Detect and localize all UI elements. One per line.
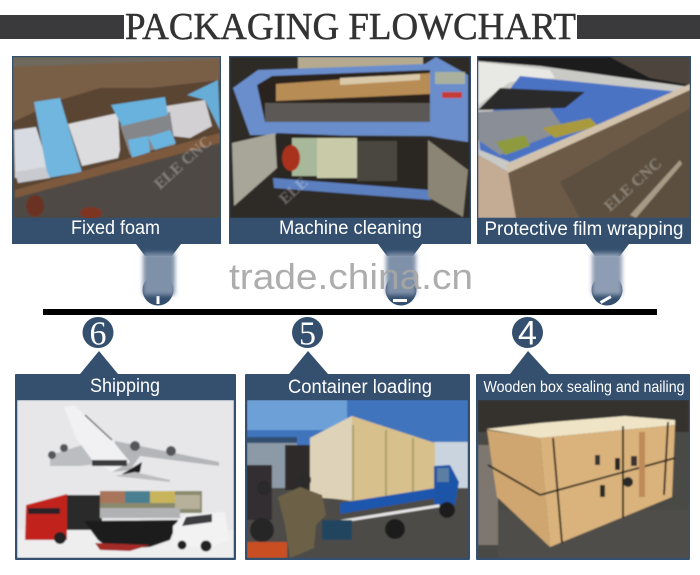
label: Shipping: Shipping	[90, 376, 160, 397]
badge: step 5: 5	[299, 316, 316, 352]
badge: step 6: 6	[90, 316, 106, 352]
photo: plane, truck, ship and van	[17, 400, 234, 558]
connector: step 1 badge	[136, 244, 181, 306]
badge: step 4: 4	[518, 314, 537, 352]
timeline bar	[43, 309, 657, 315]
badge: step 4	[510, 314, 549, 374]
badge: step 5	[289, 316, 328, 374]
photo: laser machine: ELE	[276, 174, 311, 208]
connector: step 3 badge	[586, 244, 629, 306]
photo: film wrapped machine in crate: ELE CNC	[601, 155, 665, 215]
photo: laser machine	[230, 57, 470, 218]
panel: step 1 fixed foam	[12, 56, 221, 244]
label: Machine cleaning: Machine cleaning	[279, 218, 422, 239]
label: Protective film wrapping: Protective film wrapping	[484, 219, 684, 240]
connector: step 2 badge	[378, 244, 422, 306]
panel: step 6 shipping	[15, 374, 236, 560]
label: Fixed foam: Fixed foam	[71, 218, 160, 239]
photo: foam in cardboard box: ELE CNC	[151, 133, 215, 193]
watermark: trade.china.cn: trade.china.cn	[229, 256, 473, 297]
panel: step 4 wooden box sealing and nailing	[476, 374, 690, 560]
title banner	[0, 6, 700, 48]
photo: foam in cardboard box	[13, 57, 220, 219]
panel: step 3 protective film wrapping	[477, 56, 691, 244]
photo: strapped wooden crate	[478, 400, 689, 558]
label: Container loading: Container loading	[288, 377, 432, 398]
badge: step 6	[80, 316, 118, 374]
title: PACKAGING FLOWCHART	[125, 6, 576, 48]
photo: film wrapped machine in crate	[478, 57, 690, 218]
panel: step 2 machine cleaning	[229, 56, 471, 244]
photo: crate on blue truck	[247, 400, 468, 558]
panel: step 5 container loading	[245, 374, 470, 560]
